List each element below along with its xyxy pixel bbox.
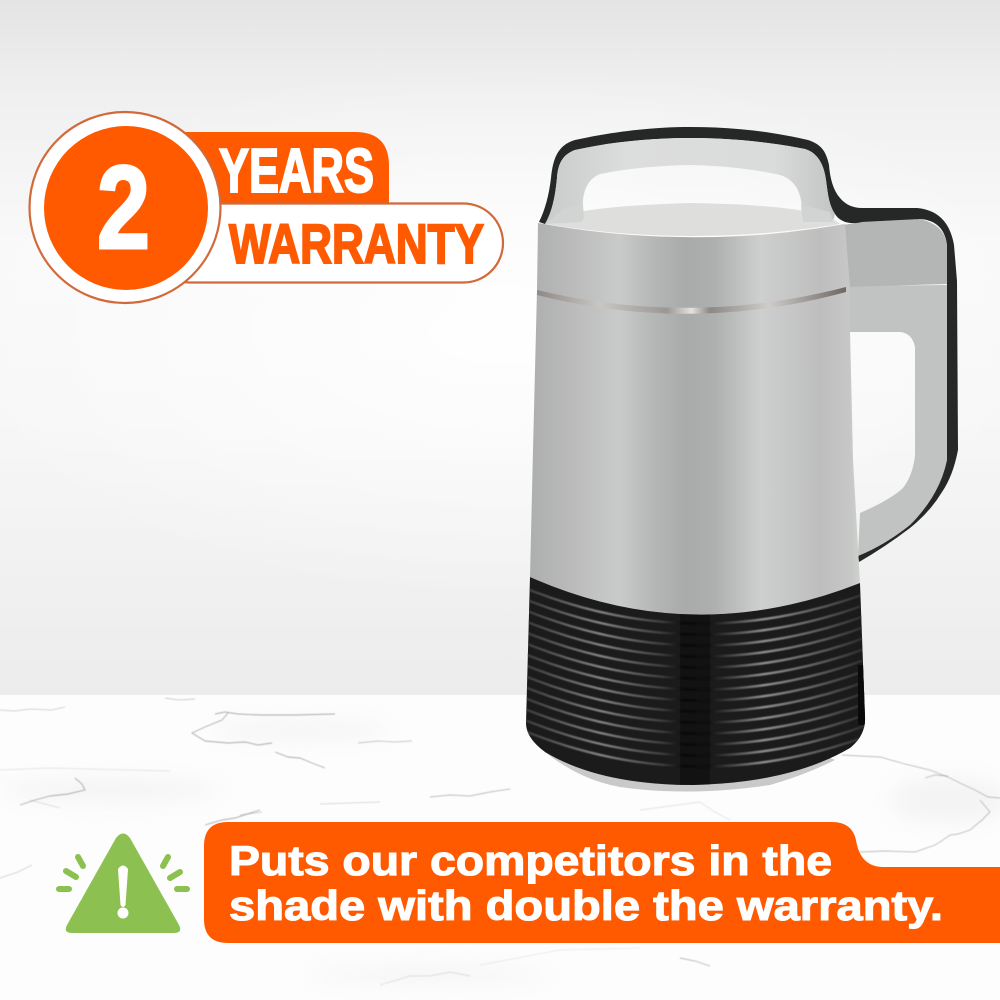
callout line two: shade with double the warranty.	[229, 882, 943, 929]
lid top surface	[545, 203, 840, 236]
side handle lower section	[847, 285, 947, 556]
warranty label: WARRANTY	[229, 212, 484, 275]
silver foot	[545, 745, 835, 792]
wall background	[0, 0, 1000, 696]
callout line one: Puts our competitors in the	[229, 837, 832, 884]
warranty badge	[30, 112, 503, 303]
side handle upper section	[843, 219, 947, 287]
years tab	[180, 132, 389, 206]
years label: YEARS	[219, 137, 374, 206]
black handle rim	[539, 127, 958, 562]
body shell	[530, 223, 860, 615]
warranty pill	[150, 204, 503, 282]
steel ring	[537, 287, 846, 314]
number 2: 2	[97, 142, 150, 274]
marble countertop	[0, 695, 1000, 1000]
top carry handle	[545, 138, 835, 224]
outer ring	[30, 112, 220, 303]
kettle product photo	[520, 127, 958, 792]
ribbed black base	[520, 570, 870, 790]
inner circle	[44, 126, 208, 290]
icon: green warning triangle	[59, 834, 187, 933]
carry handle feet	[545, 204, 833, 224]
callout banner	[204, 822, 1000, 943]
